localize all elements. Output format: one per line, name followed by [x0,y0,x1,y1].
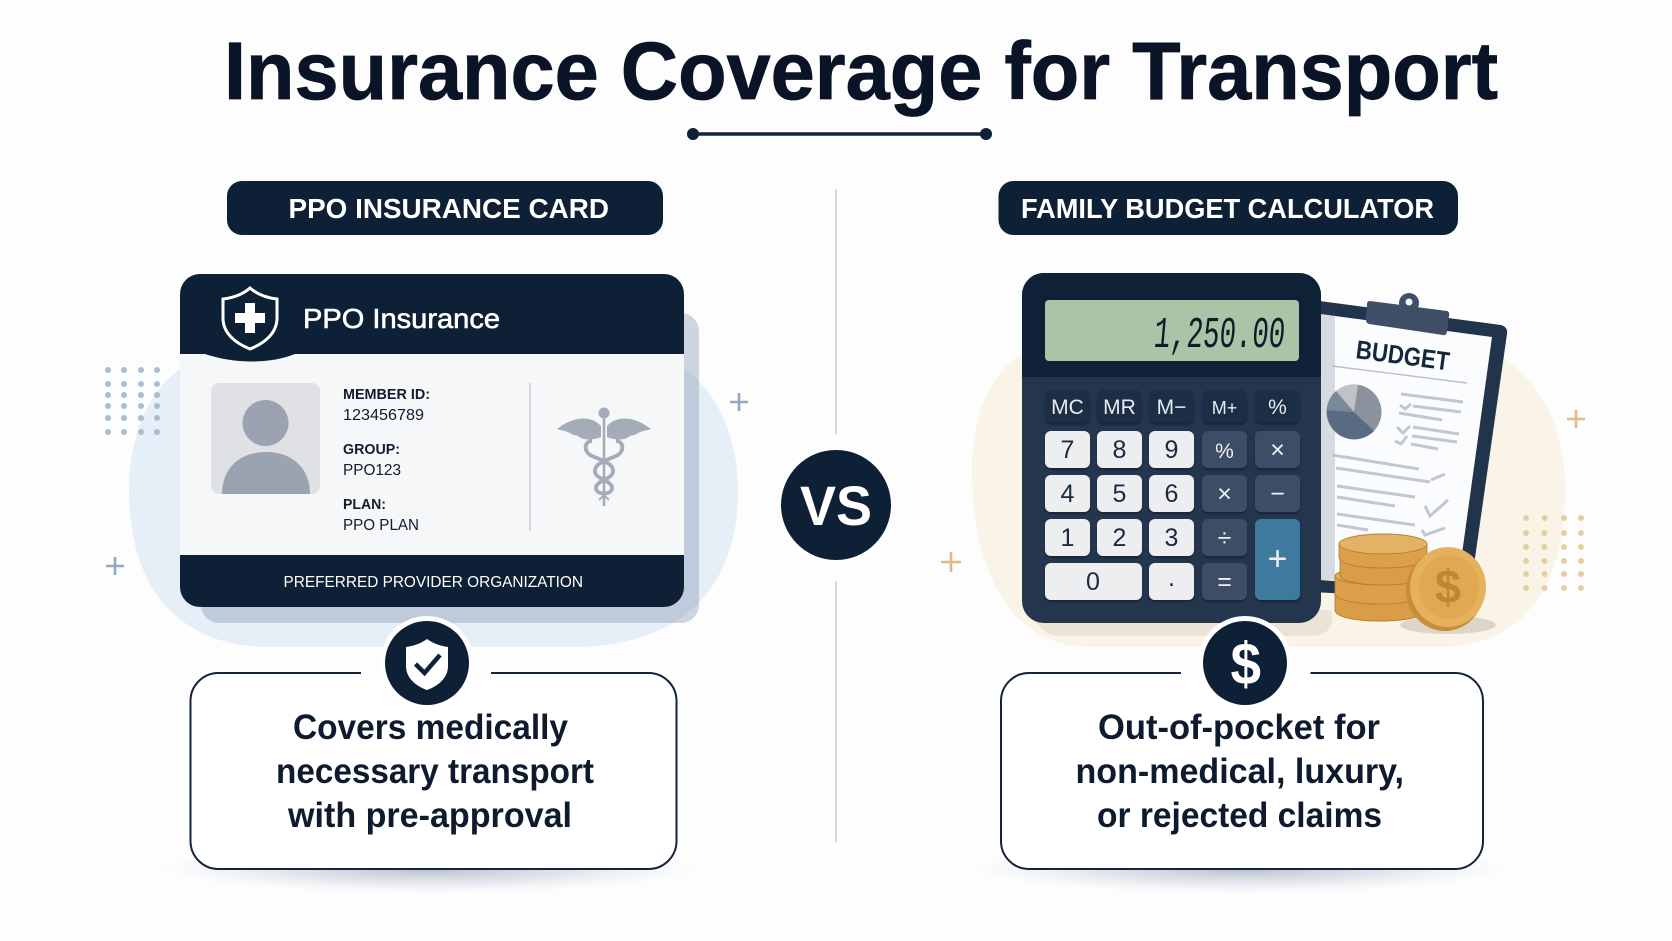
decorative dots right [1523,515,1584,591]
number keys: . [1168,564,1175,592]
coin stack [1335,534,1427,621]
member photo placeholder [211,383,320,494]
pie chart [1326,384,1382,440]
calculator ground shadow [1030,610,1332,636]
number keys: 1 [1061,524,1074,552]
calculator display [1045,300,1299,361]
clipboard heading: BUDGET [1354,334,1451,376]
right heading pill [998,181,1458,235]
callout: out-of-pocket costs [969,616,1513,894]
callout text: with pre-approval [287,795,572,835]
decorative dots left [105,367,160,435]
operator keys: × [1270,436,1285,464]
icon: dollar badge [1198,616,1292,710]
number keys: 7 [1061,436,1074,464]
left heading pill [227,181,663,235]
title: Insurance Coverage for Transport [224,26,1498,117]
member details: PPO PLAN [343,517,419,534]
insurance card [180,274,684,607]
title underline [687,128,992,140]
operator keys [1202,431,1300,600]
card brand name: PPO Insurance [303,303,500,334]
member details: PLAN: [343,497,386,513]
memory keys: MC [1051,396,1084,419]
operator keys: + [1268,540,1287,578]
plus mark left side [941,552,961,572]
panel: family budget calculator [941,181,1585,647]
calculator [1022,273,1321,623]
callout text: Out-of-pocket for [1098,707,1380,747]
member details: PPO123 [343,462,401,479]
operator keys: − [1270,480,1285,508]
number keys: 0 [1086,568,1100,596]
member details: 123456789 [343,407,424,424]
right heading pill: FAMILY BUDGET CALCULATOR [1021,193,1434,224]
number keys: 5 [1113,480,1126,508]
member details: MEMBER ID: [343,387,430,403]
plus mark left [106,557,124,575]
left heading pill: PPO INSURANCE CARD [288,193,609,224]
beige background blob [972,340,1565,647]
operator keys: × [1217,480,1232,508]
number keys [1045,431,1194,600]
budget clipboard [1312,293,1507,600]
VS badge [781,450,891,560]
card shadow layer [201,313,699,623]
vertical rule [529,383,531,531]
callout: insurance coverage [158,616,702,894]
memory keys: % [1268,396,1287,419]
memory keys: M− [1157,396,1186,419]
shield logo [223,288,277,349]
blue background blob [129,345,738,647]
number keys: 9 [1165,436,1178,464]
number keys: 8 [1113,436,1126,464]
clipboard clip [1366,293,1449,335]
callout text: necessary transport [276,751,594,791]
callout text: Covers medically [293,707,568,747]
card footer [180,555,684,607]
number keys: 2 [1113,524,1126,552]
operator keys: ÷ [1218,524,1231,552]
dollar coin: $ [1435,560,1461,613]
number keys: 4 [1061,480,1075,508]
coins shadow [1400,616,1496,634]
dollar coin [1406,547,1486,631]
member details [343,387,430,534]
callout box [190,673,677,869]
operator keys: % [1215,440,1234,463]
callout shadow [969,844,1513,894]
centre divider [835,189,837,842]
memory keys: MR [1103,396,1136,419]
icon: shield check [380,616,474,710]
number keys: 6 [1165,480,1178,508]
number keys: 3 [1165,524,1178,552]
member details: GROUP: [343,442,400,458]
callout text: non-medical, luxury, [1076,751,1404,791]
card footer label: PREFERRED PROVIDER ORGANIZATION [284,574,583,591]
VS badge: VS [800,474,872,537]
checklist lines [1332,394,1463,535]
callout text [1076,707,1404,835]
card header [180,274,684,362]
memory keys: M+ [1212,398,1237,418]
callout text: or rejected claims [1097,795,1382,835]
icon: caduceus [557,408,651,506]
callout box [1001,673,1483,869]
calculator: 1,250.00 [1152,311,1287,361]
panel: PPO insurance card [105,181,748,647]
plus mark right side [1567,410,1585,428]
plus mark right [730,393,748,411]
icon: dollar badge: $ [1230,631,1261,697]
callout text [276,707,594,835]
memory keys [1045,390,1300,423]
callout shadow [158,844,702,894]
operator keys: = [1217,568,1232,596]
